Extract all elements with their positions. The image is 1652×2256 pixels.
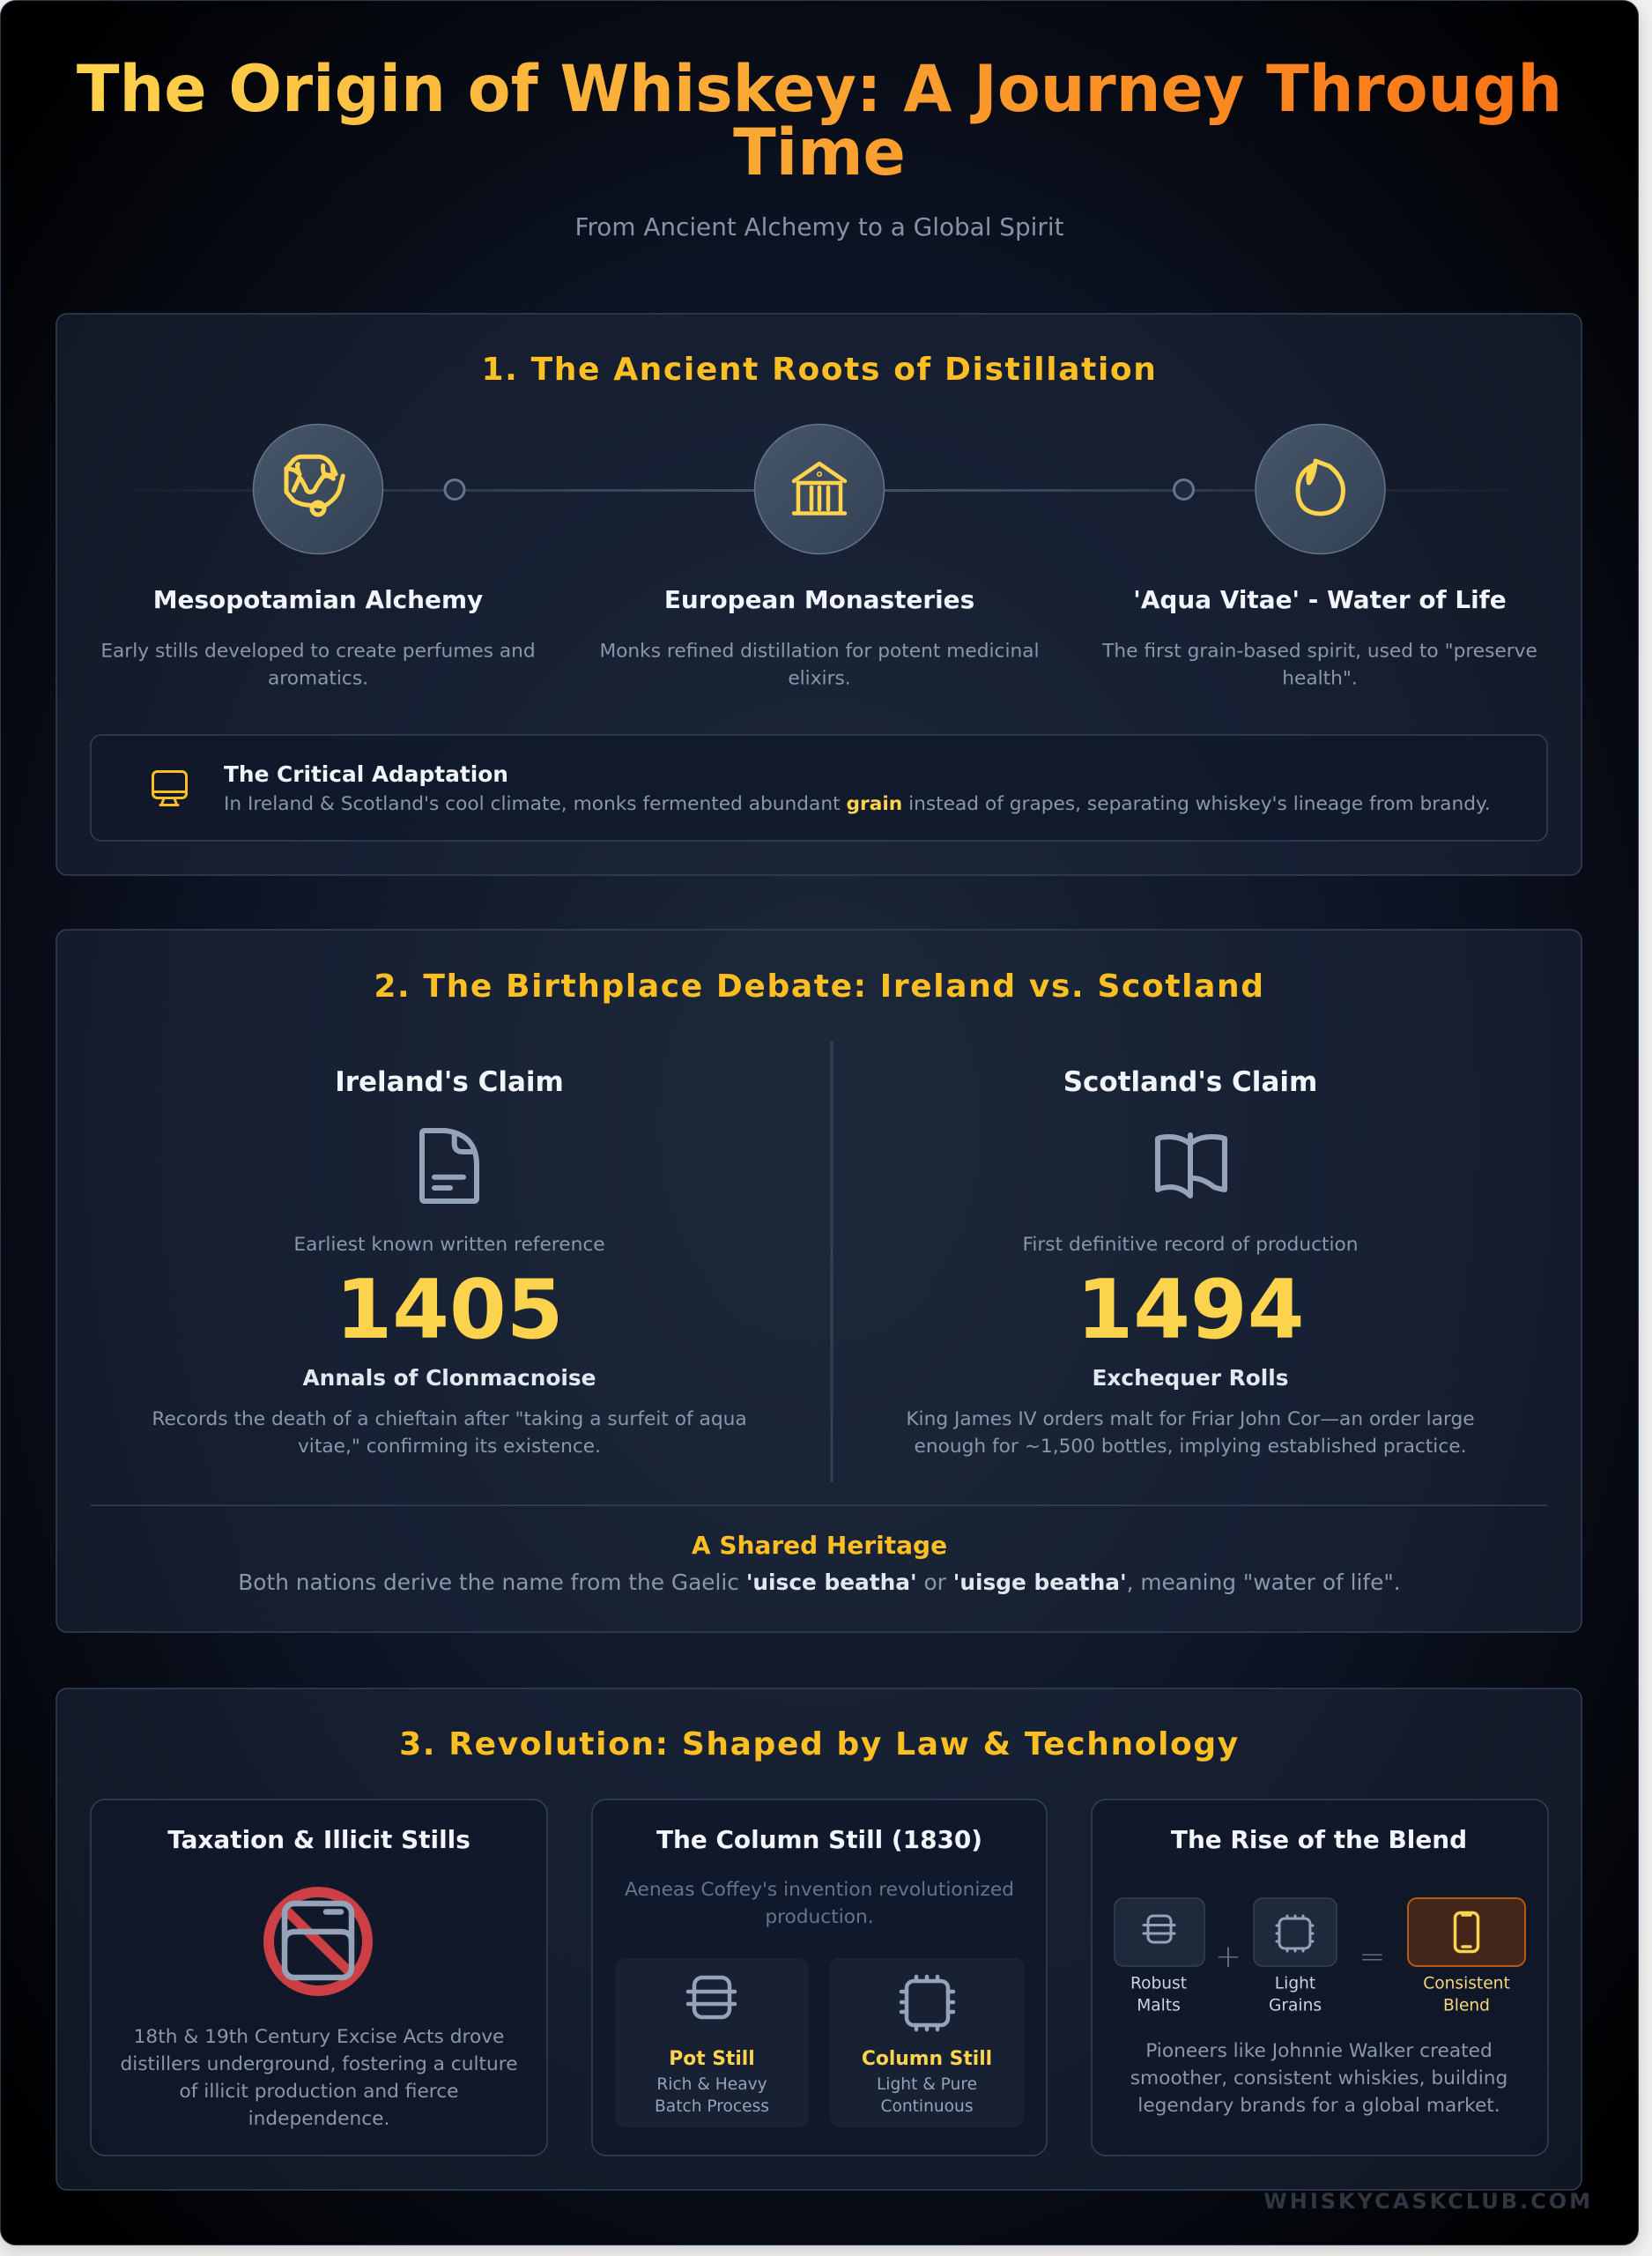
heading: section 3: 3. Revolution: Shaped by Law & Technology <box>399 1725 1239 1762</box>
card: rise of the blend: Pioneers like Johnnie Walker created <box>1145 2039 1492 2062</box>
title: The Origin of Whiskey: A Journey Through <box>76 52 1562 127</box>
blend ingredient: light grains: Light <box>1274 1974 1315 1993</box>
card: rise of the blend: legendary brands for a global market. <box>1137 2094 1500 2117</box>
step text: European Monasteries: Monks refined distillation for potent medicinal <box>599 640 1039 662</box>
blend ingredient: robust malts: Robust <box>1130 1974 1187 1993</box>
watermark: WHISKYCASKCLUB.COM <box>1263 2189 1593 2214</box>
step text: Mesopotamian Alchemy: aromatics. <box>267 667 368 689</box>
timeline step: Aqua Vitae <box>1255 424 1385 553</box>
timeline connector <box>88 479 1551 499</box>
callout: the critical adaptation: In Ireland & Scotland's cool climate, monks fermented abundant grain instead of grapes, separating whiskey's lineage from brandy. <box>224 793 1490 814</box>
card: taxation and illicit stills: 18th & 19th Century Excise Acts drove <box>133 2025 504 2048</box>
column: Scotland's claim: Exchequer Rolls <box>1092 1364 1288 1391</box>
step text: Mesopotamian Alchemy: Early stills developed to create perfumes and <box>100 640 535 662</box>
column: Ireland's claim <box>152 1066 746 1458</box>
step text: European Monasteries <box>599 585 1039 689</box>
column: Scotland's claim: enough for ~1,500 bottles, implying established practice. <box>914 1435 1466 1458</box>
panel: revolution <box>56 1688 1581 2189</box>
blend result: consistent blend <box>1408 1898 1524 2015</box>
column: Ireland's claim: Ireland's Claim <box>335 1066 563 1098</box>
card: rise of the blend: smoother, consistent whiskies, building <box>1130 2067 1508 2089</box>
icon: open book <box>1158 1135 1225 1195</box>
plus sign: + <box>1214 1939 1241 1974</box>
panel: birthplace debate <box>56 929 1581 1632</box>
stat: 1494: 1494 <box>1076 1262 1304 1357</box>
comparison: pot still: Rich & Heavy <box>656 2074 767 2094</box>
comparison: column still <box>830 1958 1024 2127</box>
timeline step: European Monasteries <box>754 424 884 553</box>
callout: the critical adaptation <box>90 735 1547 841</box>
icon: pot still <box>687 1978 735 2016</box>
callout: the critical adaptation: The Critical Adaptation <box>224 761 507 786</box>
blend ingredient: light grains <box>1253 1898 1336 2015</box>
comparison: pot still: Pot Still <box>669 2048 754 2069</box>
card: column still: production. <box>765 1905 873 1928</box>
step text: Aqua Vitae <box>1101 585 1537 689</box>
step text: European Monasteries: European Monasteries <box>663 585 974 613</box>
step text: Aqua Vitae: 'Aqua Vitae' - Water of Life <box>1133 585 1506 613</box>
card: taxation and illicit stills: Taxation & Illicit Stills <box>167 1824 470 1854</box>
equals sign: = <box>1359 1939 1385 1974</box>
comparison: column still: Continuous <box>880 2097 973 2115</box>
heading: section 1: 1. The Ancient Roots of Distillation <box>481 351 1157 388</box>
step text: Aqua Vitae: health". <box>1282 667 1357 689</box>
blend result: consistent blend: Blend <box>1443 1996 1489 2015</box>
card: column still: Aeneas Coffey's invention revolutionized <box>625 1879 1013 1900</box>
card: taxation and illicit stills <box>90 1800 546 2156</box>
column: Ireland's claim: Earliest known written reference <box>293 1234 604 1255</box>
stat: 1405: 1405 <box>335 1262 563 1357</box>
comparison: column still: Column Still <box>861 2048 992 2069</box>
column: Scotland's claim: King James IV orders malt for Friar John Cor—an order large <box>906 1408 1474 1429</box>
blend ingredient: robust malts <box>1114 1898 1204 2015</box>
step text: Mesopotamian Alchemy <box>100 585 535 689</box>
icon: flame drop <box>1297 460 1343 513</box>
column divider <box>830 1040 833 1482</box>
column: Scotland's claim <box>906 1066 1474 1458</box>
card: taxation and illicit stills: independence. <box>248 2108 389 2129</box>
shared heritage note <box>238 1530 1400 1595</box>
blend result: consistent blend: Consistent <box>1423 1974 1509 1993</box>
shared heritage note: Both nations derive the name from the Gaelic 'uisce beatha' or 'uisge beatha', meaning "water of life". <box>238 1569 1400 1595</box>
blend ingredient: light grains: Grains <box>1268 1996 1322 2015</box>
icon: document <box>421 1130 476 1200</box>
icon: column still <box>900 1976 953 2029</box>
title: Time <box>733 115 905 190</box>
column: Ireland's claim: vitae," confirming its existence. <box>297 1435 601 1458</box>
column: Scotland's claim: First definitive record of production <box>1022 1234 1358 1255</box>
step text: Aqua Vitae: The first grain-based spirit, used to "preserve <box>1101 640 1537 662</box>
subtitle: From Ancient Alchemy to a Global Spirit <box>574 212 1063 241</box>
icon: classical building <box>793 464 844 513</box>
step text: European Monasteries: elixirs. <box>788 667 850 689</box>
card: taxation and illicit stills: of illicit production and fierce <box>179 2080 458 2103</box>
comparison: pot still <box>615 1958 809 2127</box>
card: taxation and illicit stills: distillers underground, fostering a culture <box>120 2053 517 2074</box>
icon: monitor <box>152 771 186 805</box>
icon: alchemy vessel <box>285 456 343 515</box>
comparison: column still: Light & Pure <box>876 2074 977 2094</box>
card: rise of the blend: The Rise of the Blend <box>1170 1824 1467 1854</box>
heading: section 2: 2. The Birthplace Debate: Ireland vs. Scotland <box>374 968 1264 1005</box>
column: Scotland's claim: Scotland's Claim <box>1063 1066 1317 1098</box>
blend ingredient: robust malts: Malts <box>1137 1996 1180 2015</box>
panel: ancient roots of distillation <box>56 314 1581 874</box>
shared heritage note: A Shared Heritage <box>691 1530 947 1560</box>
card: rise of the blend <box>1091 1800 1547 2156</box>
card: column still <box>592 1800 1047 2156</box>
column: Ireland's claim: Records the death of a chieftain after "taking a surfeit of aqua <box>152 1408 746 1429</box>
icon: prohibited still <box>268 1891 367 1990</box>
title <box>76 52 1562 190</box>
card: column still: The Column Still (1830) <box>656 1824 982 1854</box>
column: Ireland's claim: Annals of Clonmacnoise <box>302 1364 596 1391</box>
timeline step: Mesopotamian Alchemy <box>253 424 382 553</box>
step text: Mesopotamian Alchemy: Mesopotamian Alchemy <box>152 585 483 613</box>
comparison: pot still: Batch Process <box>655 2097 768 2115</box>
